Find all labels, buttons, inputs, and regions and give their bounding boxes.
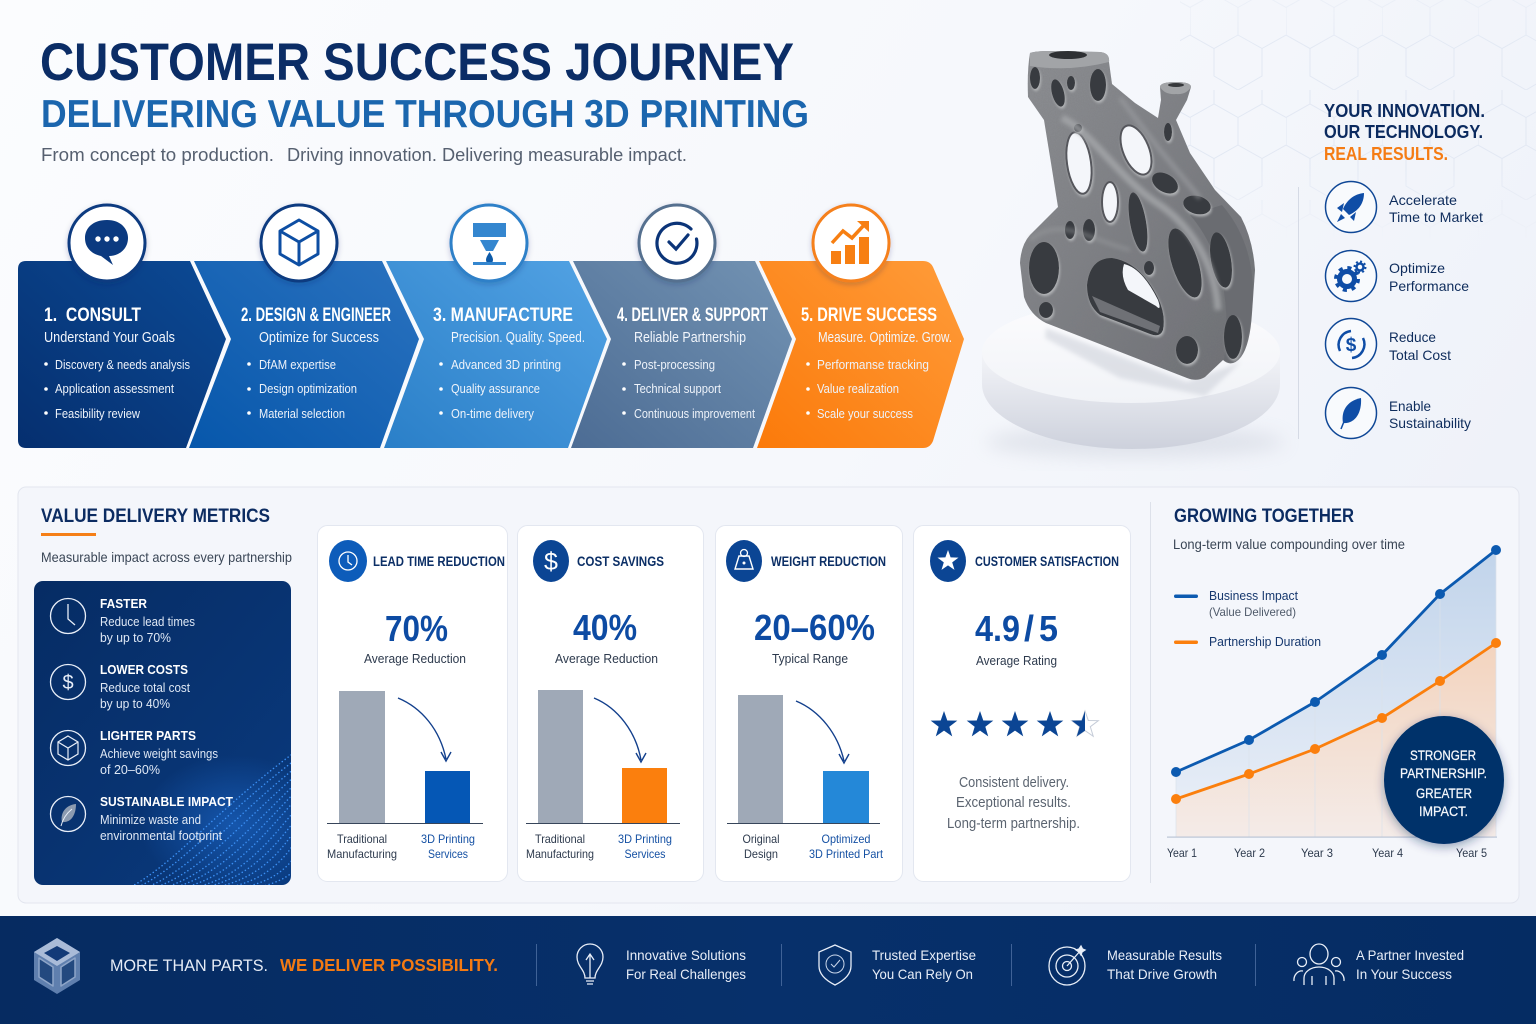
item: partner invested: In Your Success	[1356, 966, 1452, 982]
legend: (Value Delivered)	[1209, 605, 1296, 619]
title block	[40, 33, 809, 165]
card: lead time reduction: Average Reduction	[364, 651, 466, 666]
card: customer satisfaction	[914, 526, 1130, 882]
benefit: optimize: Optimize	[1389, 260, 1445, 276]
card: weight reduction	[716, 526, 902, 882]
benefit: sustainability	[1326, 388, 1471, 438]
growing together section	[1150, 502, 1504, 883]
step 3: manufacture: Advanced 3D printing	[451, 357, 561, 372]
footer slogan	[110, 955, 498, 975]
tagline: From concept to production.	[41, 145, 274, 165]
icon: star badge	[930, 540, 966, 582]
bar chart: Optimized	[822, 832, 870, 846]
slogan: YOUR INNOVATION.	[1324, 101, 1485, 121]
bar chart	[727, 695, 884, 861]
growing together section: GROWING TOGETHER	[1174, 506, 1354, 527]
item: innovative solutions	[577, 944, 746, 984]
step 4: deliver and support: Technical support	[634, 381, 721, 396]
step 4: deliver and support	[571, 205, 792, 448]
bar chart: Original	[742, 832, 780, 846]
icon: weight	[726, 540, 762, 582]
icon: cube	[280, 220, 318, 265]
bar chart: 3D Printing	[618, 832, 672, 846]
benefit: reduce cost: Reduce	[1389, 329, 1436, 345]
item: innovative solutions: For Real Challenges	[626, 966, 746, 982]
line chart	[1167, 545, 1501, 860]
icon: dollar: $	[544, 548, 558, 576]
bar chart: Traditional	[337, 832, 387, 846]
step 5: drive success: Value realization	[817, 381, 899, 396]
step 4: deliver and support: Reliable Partnership	[634, 330, 746, 346]
benefit: accelerate	[1326, 182, 1483, 232]
icon: clock	[329, 540, 367, 582]
bar chart: Manufacturing	[327, 847, 397, 861]
card: customer satisfaction: Average Rating	[976, 653, 1057, 668]
footer slogan: MORE THAN PARTS.	[110, 956, 268, 975]
icon: dollar	[533, 540, 569, 582]
metrics panel background	[18, 487, 1519, 903]
rating number: 4.9	[975, 608, 1020, 649]
benefits column	[1298, 101, 1485, 439]
see-through openings	[1063, 121, 1158, 222]
card: weight reduction: WEIGHT REDUCTION	[771, 554, 886, 569]
card: lead time reduction: LEAD TIME REDUCTION	[373, 554, 505, 569]
tagline: Driving innovation. Delivering measurable impact.	[287, 145, 687, 165]
dark cavities	[1029, 67, 1242, 364]
benefit: reduce cost: Total Cost	[1389, 347, 1451, 363]
item: lighter parts	[50, 729, 218, 777]
line chart: Year 1	[1167, 846, 1197, 860]
benefit: optimize: Performance	[1389, 278, 1469, 294]
callout circle: GREATER	[1416, 786, 1472, 801]
item: lower costs: $	[62, 672, 74, 694]
step 2: design and engineer: Optimize for Success	[259, 330, 379, 346]
benefit: accelerate: Accelerate	[1389, 192, 1457, 208]
step 5: drive success: 5. DRIVE SUCCESS	[801, 305, 937, 326]
benefit: accelerate: Time to Market	[1389, 209, 1483, 225]
closing statement: Exceptional results.	[956, 795, 1071, 811]
step 5: drive success: Measure. Optimize. Grow.	[818, 330, 952, 346]
step 2: design and engineer: Material selection	[259, 406, 345, 421]
icon: growth chart	[831, 221, 869, 264]
benefit: optimize	[1326, 250, 1469, 302]
line chart: Year 5	[1456, 846, 1487, 860]
bar chart: Services	[624, 847, 666, 861]
icon: speech bubble	[85, 220, 128, 265]
bar chart: Design	[744, 847, 778, 861]
slogan	[1324, 101, 1485, 164]
step 1: consult	[18, 205, 226, 448]
bar chart: 3D Printing	[421, 832, 475, 846]
item: faster: Reduce lead times	[100, 615, 195, 629]
benefit: sustainability: Sustainability	[1389, 415, 1471, 431]
item: faster: by up to 70%	[100, 631, 171, 645]
step 3: manufacture: Quality assurance	[451, 381, 540, 396]
step 3: manufacture: On-time delivery	[451, 406, 534, 421]
callout circle	[1384, 716, 1504, 844]
closing statement	[947, 775, 1080, 832]
footer band	[0, 916, 1536, 1024]
legend: Partnership Duration	[1209, 635, 1321, 649]
rating number	[975, 608, 1058, 649]
item: measurable results: That Drive Growth	[1107, 966, 1217, 982]
item: sustainable impact	[50, 795, 233, 843]
closing statement: Consistent delivery.	[959, 775, 1069, 791]
legend	[1174, 589, 1321, 649]
item: trusted expertise: You Can Rely On	[872, 966, 973, 982]
card: weight reduction: Typical Range	[772, 651, 848, 666]
bar chart	[526, 690, 680, 861]
item: lighter parts: Achieve weight savings	[100, 747, 218, 761]
item: sustainable impact: environmental footprint	[100, 829, 223, 843]
3d printed bracket on pedestal	[982, 51, 1285, 458]
step 3: manufacture: Precision. Quality. Speed.	[451, 330, 585, 346]
card: cost savings: Average Reduction	[555, 651, 658, 666]
value delivery metrics heading: Measurable impact across every partnership	[41, 549, 292, 565]
callout circle: IMPACT.	[1419, 804, 1468, 819]
bar chart: Manufacturing	[526, 847, 594, 861]
item: partner invested	[1294, 944, 1464, 985]
item: trusted expertise	[819, 945, 976, 985]
closing statement: Long-term partnership.	[947, 816, 1080, 832]
card: cost savings: COST SAVINGS	[577, 554, 664, 569]
step 1: consult: Feasibility review	[55, 406, 141, 421]
step 1: consult: 1. CONSULT	[44, 305, 141, 326]
step 1: consult: Understand Your Goals	[44, 330, 175, 346]
step 3: manufacture	[384, 205, 607, 448]
item: lower costs: Reduce total cost	[100, 681, 190, 695]
benefit: sustainability: Enable	[1389, 398, 1431, 414]
icon: 3d printer nozzle	[473, 223, 506, 265]
line chart: Year 2	[1234, 846, 1265, 860]
benefit: reduce cost: $	[1346, 335, 1357, 356]
value delivery metrics heading	[41, 506, 292, 565]
logo cube	[34, 938, 80, 994]
step 4: deliver and support: Continuous improvement	[634, 406, 755, 421]
slogan: REAL RESULTS.	[1324, 144, 1448, 164]
main title: CUSTOMER SUCCESS JOURNEY	[40, 33, 794, 92]
card: cost savings	[518, 526, 704, 882]
item: faster	[50, 597, 195, 645]
callout circle: STRONGER	[1410, 748, 1476, 763]
item: faster: FASTER	[100, 597, 147, 611]
slogan: OUR TECHNOLOGY.	[1324, 122, 1483, 142]
step 2: design and engineer: 2. DESIGN & ENGINEER	[241, 305, 391, 326]
bar chart	[327, 691, 483, 861]
benefits summary dark panel	[34, 581, 291, 885]
step 5: drive success: Performanse tracking	[817, 357, 929, 372]
step 3: manufacture: 3. MANUFACTURE	[433, 305, 573, 326]
vertical divider	[1298, 187, 1299, 439]
bar chart: 3D Printed Part	[809, 847, 884, 861]
value delivery metrics heading: VALUE DELIVERY METRICS	[41, 506, 270, 527]
tagline	[41, 145, 687, 165]
item: measurable results: Measurable Results	[1107, 947, 1222, 963]
line chart: Year 4	[1372, 846, 1403, 860]
rating number: 5	[1039, 608, 1058, 649]
step 1: consult: Application assessment	[55, 381, 174, 396]
bar chart: Services	[428, 847, 468, 861]
item: measurable results	[1049, 946, 1222, 985]
card: lead time reduction: 70%	[385, 608, 448, 649]
item: trusted expertise: Trusted Expertise	[872, 947, 976, 963]
item: lighter parts: LIGHTER PARTS	[100, 729, 196, 743]
item: lower costs: LOWER COSTS	[100, 663, 188, 677]
process chevrons	[18, 205, 964, 448]
item: lighter parts: of 20–60%	[100, 763, 160, 777]
item: lower costs: by up to 40%	[100, 697, 170, 711]
line chart: Year 3	[1301, 846, 1333, 860]
footer slogan: WE DELIVER POSSIBILITY.	[280, 955, 498, 975]
item: lower costs	[50, 663, 190, 711]
rating number: /	[1024, 608, 1034, 649]
subtitle: DELIVERING VALUE THROUGH 3D PRINTING	[41, 93, 809, 136]
step 2: design and engineer	[189, 205, 419, 448]
card: weight reduction: 20–60%	[754, 607, 875, 648]
icon: check circle	[657, 223, 697, 263]
item: innovative solutions: Innovative Solutions	[626, 947, 746, 963]
legend: Business Impact	[1209, 589, 1298, 603]
growing together section: Long-term value compounding over time	[1173, 536, 1405, 552]
step 2: design and engineer: Design optimization	[259, 381, 357, 396]
card: cost savings: 40%	[573, 607, 637, 648]
card: lead time reduction	[318, 526, 508, 882]
step 1: consult: Discovery & needs analysis	[55, 357, 190, 372]
step 4: deliver and support: 4. DELIVER & SUPPORT	[617, 305, 768, 326]
item: partner invested: A Partner Invested	[1356, 947, 1464, 963]
callout circle: PARTNERSHIP.	[1400, 766, 1487, 781]
step 5: drive success: Scale your success	[817, 406, 913, 421]
card: customer satisfaction: CUSTOMER SATISFACTION	[975, 554, 1119, 569]
step 5: drive success	[757, 205, 964, 448]
step 2: design and engineer: DfAM expertise	[259, 357, 336, 372]
item: sustainable impact: SUSTAINABLE IMPACT	[100, 795, 233, 809]
item: sustainable impact: Minimize waste and	[100, 813, 201, 827]
rating stars	[931, 711, 1098, 736]
step 4: deliver and support: Post-processing	[634, 357, 715, 372]
benefit: reduce cost	[1326, 318, 1451, 370]
bar chart: Traditional	[535, 832, 585, 846]
